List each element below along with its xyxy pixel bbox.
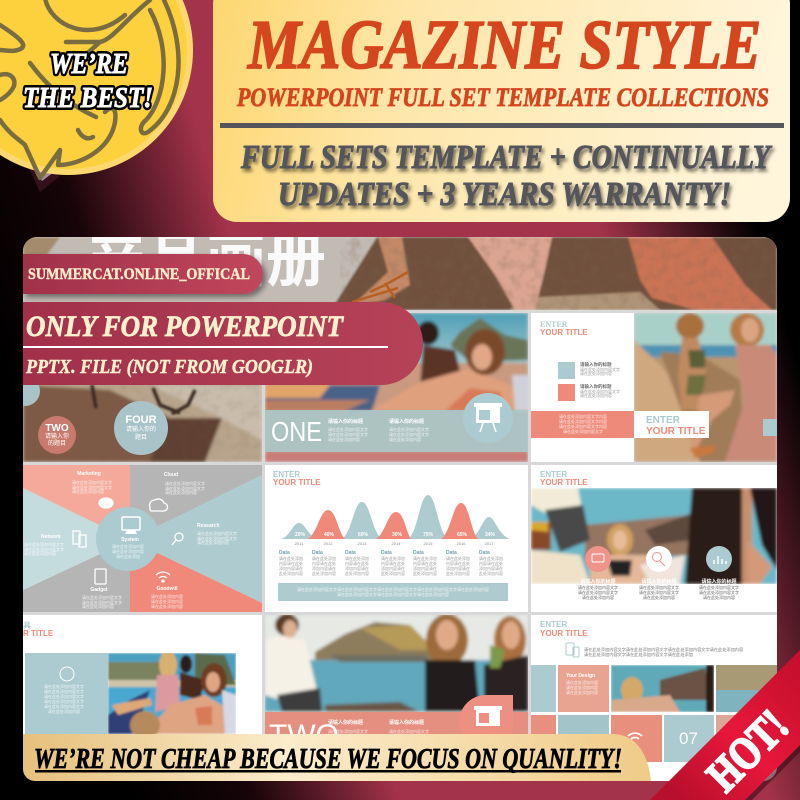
chart captions: 添加内容请在 <box>446 565 470 571</box>
legend squares: 请在此处添加内容文字 <box>580 388 620 394</box>
centre circle: system: System <box>121 537 139 543</box>
slide title: R TITLE <box>23 629 54 638</box>
slide title <box>23 621 54 638</box>
intro text: 请在此处添加内容文字请在此处添加内容文字请在此处添加内容文字请在此处添加内容 <box>584 646 743 653</box>
summary bar: 请在此处添加内容文字请在此处添加内容文字请在此处添加内容 <box>337 591 449 597</box>
slide: top photo strip <box>23 237 777 310</box>
photo: pool group <box>108 651 236 739</box>
teal text panel: 请在此处添加内容文字 <box>44 683 84 689</box>
circle: FOUR: 题目 <box>135 434 147 441</box>
chart captions: 添加内容请在 <box>413 565 437 571</box>
legend squares: 请在此处添加内容 <box>580 392 612 398</box>
ONE band: 请在此处添加内容 <box>389 436 421 442</box>
slide: tile grid <box>531 615 777 781</box>
slide title: YOUR TITLE <box>540 629 588 638</box>
chart: peaks: 75% <box>423 532 434 538</box>
teal text panel <box>25 653 108 738</box>
teal text panel: 请在此处添加内容文字 <box>44 698 84 704</box>
circle: search <box>646 546 672 572</box>
summary bar <box>278 583 508 601</box>
salmon text bar: 请在此处添加内容文字内容 <box>559 418 607 424</box>
slide: TWO <box>265 614 528 757</box>
sector labels: 请在此处添加内容 <box>151 603 183 609</box>
photo: sea and group <box>531 488 777 585</box>
tiles: 请在此处添加内容 <box>566 684 598 690</box>
slide: teal panel with photo <box>23 615 262 740</box>
circle: chart <box>706 546 732 572</box>
slide title: YOUR TITLE <box>273 478 321 487</box>
photo: sea and group: 请输入你的标题 <box>701 578 737 585</box>
TWO band: 请在此处添加内容文字 <box>389 728 429 734</box>
ONE band: 请在此处添加内容文字 <box>389 426 429 432</box>
TWO band: TWO <box>269 719 339 752</box>
file note: PPTX. FILE (NOT FROM GOOGLR) <box>25 356 313 378</box>
chart captions: 此处添加内容 <box>413 570 437 576</box>
photo: two women on rocks <box>634 313 777 462</box>
teal text panel: 请在此处添加内容文字 <box>44 688 84 694</box>
chart captions: 内容请在此处 <box>345 560 369 566</box>
legend squares: 请输入你的标题 <box>580 361 612 368</box>
circle captions: 请在此处添加内容文字 <box>699 584 739 590</box>
sector labels: Network <box>41 534 61 540</box>
circle: TWO: TWO <box>45 423 69 434</box>
TWO band: 请输入你的标题 <box>389 719 424 726</box>
hot ribbon <box>650 650 800 800</box>
sector labels: Research <box>197 523 220 529</box>
slide: ONE <box>265 313 528 462</box>
chart captions: 内容请在此处 <box>413 560 437 566</box>
circle captions: 请在此处添加内容文字 <box>578 584 618 590</box>
banner text: WE’RE NOT CHEAP BECAUSE WE FOCUS ON QUANLITY! <box>34 744 622 775</box>
promise text <box>240 139 773 213</box>
maroon label: account name <box>23 254 263 294</box>
salmon text bar: 请在此处添加内容文字内容 <box>559 413 607 419</box>
circle: TWO: 请输入你 <box>45 432 69 440</box>
sector labels: 请在此处添加内容文字 <box>24 541 64 547</box>
chart captions: 请在此处添加 <box>381 555 405 561</box>
circle: FOUR <box>114 401 168 455</box>
sector labels: Cloud <box>164 472 178 478</box>
sector: marketing <box>23 465 130 525</box>
sector labels: 请在此处添加内容文字 <box>197 535 237 541</box>
sector icons <box>73 498 183 584</box>
badge circle <box>0 0 193 175</box>
ONE band: 请在此处添加内容文字 <box>328 431 368 437</box>
ONE band: 请在此处添加内容文字 <box>389 431 429 437</box>
chart: peaks: 65% <box>457 532 468 538</box>
ONE band: 请在此处添加内容文字 <box>328 426 368 432</box>
underline <box>35 770 621 772</box>
chart captions: 添加内容请在 <box>345 565 369 571</box>
ONE band: 请在此处添加内容 <box>328 436 360 442</box>
slide title <box>540 322 588 335</box>
circle captions <box>578 584 739 600</box>
centre circle: system: 请在此处添加 <box>116 553 140 559</box>
circle captions: 请在此处添加内容文字 <box>699 589 739 595</box>
ribbon <box>650 650 800 800</box>
teal text panel: 请在此处添加内容文字 <box>44 703 84 709</box>
circle captions: 请在此处添加内容 <box>643 594 675 600</box>
slide: enter your title with photo <box>531 313 777 462</box>
chart: peaks: 2012 <box>324 541 333 546</box>
ONE band: 请输入你的标题 <box>389 418 424 425</box>
ribbon shadow <box>745 745 800 800</box>
sector labels: 请在此处添加内容 <box>197 539 229 545</box>
teal text panel: 请在此处添加内容文字 <box>44 693 84 699</box>
slide title: ENTER <box>540 620 567 629</box>
chart captions: 内容请在此处 <box>381 560 405 566</box>
TWO band <box>265 712 528 757</box>
legend squares <box>558 361 620 401</box>
chart captions: 内容请在此处 <box>279 560 303 566</box>
summary bar: 请在此处添加内容文字请在此处添加内容文字请在此处添加内容文字请在此处添加内容文字请在此处添加内容 <box>297 586 489 592</box>
maroon label: account name: SUMMERCAT.ONLINE_OFFICAL <box>28 266 250 283</box>
badge text: THE BEST! <box>23 82 153 114</box>
sector labels: 请在此处添加内容 <box>72 488 104 494</box>
sector labels: 请在此处添加内容文字 <box>72 479 112 485</box>
salmon text bar: 请在此处添加内容文字 <box>563 428 603 434</box>
teal text panel: 请在此处添加内容 <box>48 708 80 714</box>
chart captions: 此处添加内容 <box>312 570 336 576</box>
slide title <box>540 471 588 485</box>
tiles <box>531 665 777 762</box>
sandal <box>352 272 408 302</box>
sector labels: 请在此处添加内容文字 <box>24 546 64 552</box>
circle: FOUR: 请输入你的 <box>126 425 156 433</box>
centre circle: system <box>96 507 160 571</box>
promise text: UPDATES + 3 YEARS WARRANTY! <box>278 176 731 213</box>
chart captions: 添加内容请在 <box>279 565 303 571</box>
icon: cat line drawing <box>0 0 179 178</box>
slide: system sector diagram <box>23 465 262 612</box>
chart: peaks: 34% <box>485 532 496 538</box>
sector: goodwill <box>130 552 262 612</box>
badge text <box>23 48 153 114</box>
sector: research <box>157 475 262 603</box>
chart: peaks: 2015 <box>424 541 433 546</box>
chart captions: 内容请在此处 <box>479 560 503 566</box>
TWO band: 请在此处添加内容文字 <box>328 728 368 734</box>
sector labels <box>24 471 237 609</box>
slide title <box>273 471 320 485</box>
sector labels: 请在此处添加内容文字 <box>165 480 205 486</box>
chart captions: Data <box>381 550 392 556</box>
chart captions: 请在此处添加 <box>312 555 336 561</box>
centre circle: system: 请在此处添加内容 <box>112 548 144 554</box>
tiles: 07 <box>679 729 698 748</box>
icon: presentation board <box>463 393 513 443</box>
circle: FOUR: FOUR <box>125 414 157 426</box>
salmon text bar <box>531 411 634 438</box>
chart captions <box>279 550 503 576</box>
chart captions: 请在此处添加 <box>279 555 303 561</box>
ONE band: ONE <box>271 416 322 447</box>
legend squares: 请在此处添加内容 <box>580 370 612 376</box>
circle: chat <box>585 546 611 572</box>
sector labels: 请在此处添加内容文字 <box>82 594 122 600</box>
slide title: ENTER <box>540 320 568 329</box>
chart: peaks: 2013 <box>358 541 367 546</box>
chart: peaks <box>279 495 510 546</box>
maroon label: powerpoint only <box>23 302 423 385</box>
circle captions: 请在此处添加内容 <box>582 594 614 600</box>
sector: network <box>23 488 100 590</box>
chart captions: 此处添加内容 <box>279 570 303 576</box>
chart captions: Data <box>279 550 290 556</box>
circle captions: 请在此处添加内容文字 <box>639 589 679 595</box>
chart captions: 此处添加内容 <box>345 570 369 576</box>
chart captions: Data <box>312 550 323 556</box>
sector: cloud <box>130 465 262 526</box>
TWO band: 请输入你的标题 <box>328 719 363 726</box>
slide: three circles photo <box>531 465 777 612</box>
chart: peaks: 40% <box>324 532 335 538</box>
chart captions: Data <box>345 550 356 556</box>
circle: TWO: 的题目 <box>48 439 66 447</box>
sector labels: Gadget <box>90 587 108 593</box>
icon: presentation teardrop <box>459 695 513 749</box>
chart captions: 添加内容请在 <box>312 565 336 571</box>
title card: ENTER <box>646 415 681 426</box>
chart: peaks: 2014 <box>392 541 401 546</box>
photo: sea and group: 请输入你的标题 <box>641 578 677 585</box>
header banner <box>213 0 790 222</box>
template preview collage <box>10 212 777 781</box>
slide: sand photo with circles <box>23 385 262 462</box>
chart captions: 添加内容请在 <box>381 565 405 571</box>
sector labels: 请在此处添加内容 <box>151 598 183 604</box>
chart: peaks: 2011 <box>295 541 304 546</box>
chart: peaks: 2016 <box>457 541 466 546</box>
salmon text bar: 请在此处添加内容文字内容 <box>559 423 607 429</box>
chart captions: 请在此处添加 <box>345 555 369 561</box>
photo: sea and group: 请输入你的标题 <box>580 578 616 585</box>
chart captions: Data <box>479 550 490 556</box>
intro text: 请在此处添加内容文字请在此处添加内容文字请在此处添加 <box>584 651 693 658</box>
chart: peaks: 2017 <box>485 541 494 546</box>
sector labels: Marketing <box>77 471 101 477</box>
legend squares: 请在此处添加内容文字 <box>580 366 620 372</box>
title card <box>634 411 709 438</box>
chart captions: 此处添加内容 <box>479 570 503 576</box>
bottom quality banner <box>23 734 651 781</box>
slide title: YOUR TITLE <box>540 478 588 487</box>
centre circle: system: 请在此处添加内容 <box>112 543 144 549</box>
chart captions: 此处添加内容 <box>446 570 470 576</box>
slide title: ENTER <box>273 470 300 479</box>
tiles: 请在此处添加内容 <box>566 689 598 695</box>
chart captions: 此处添加内容 <box>381 570 405 576</box>
banner panel <box>213 0 790 222</box>
heading: ONLY FOR POWERPOINT <box>26 310 345 343</box>
chart: peaks: 30% <box>392 532 403 538</box>
intro text <box>566 643 743 658</box>
chart captions: 请在此处添加 <box>413 555 437 561</box>
magazine lettering: 产品画册 <box>86 212 326 299</box>
sector labels: 请在此处添加内容文字 <box>72 484 112 490</box>
circle captions: 请在此处添加内容 <box>703 594 735 600</box>
sector labels: Goodwill <box>156 586 178 592</box>
chart captions: Data <box>413 550 424 556</box>
slide title: YOUR TITLE <box>540 328 588 337</box>
chart captions: 请在此处添加 <box>479 555 503 561</box>
white rule <box>23 346 388 348</box>
circle captions: 请在此处添加内容文字 <box>639 584 679 590</box>
badge text: WE’RE <box>50 48 128 80</box>
sector labels: 请在此处添加内容文字 <box>197 530 237 536</box>
badge text: THE BEST! <box>23 82 153 114</box>
sector: gadget <box>23 554 130 612</box>
sector labels: 请在此处添加内容文字 <box>165 485 205 491</box>
ONE band: 请输入你的标题 <box>328 418 363 425</box>
chart captions: 内容请在此处 <box>312 560 336 566</box>
chart: peaks: 20% <box>295 532 306 538</box>
slide title: ENTER <box>540 470 567 479</box>
divider <box>220 123 784 128</box>
chart captions: 内容请在此处 <box>446 560 470 566</box>
circle: teal corner <box>23 385 40 406</box>
chart captions: 添加内容请在 <box>479 565 503 571</box>
sector labels: 请在此处添加内容 <box>151 593 183 599</box>
slide: mountain chart <box>265 465 528 612</box>
title card: YOUR TITLE <box>646 426 706 437</box>
chart captions: 请在此处添加 <box>446 555 470 561</box>
slide title <box>540 620 588 638</box>
circle: TWO <box>38 416 76 454</box>
tiles: Your Design <box>566 673 595 679</box>
circle captions: 请在此处添加内容文字 <box>578 589 618 595</box>
ONE band <box>265 410 528 452</box>
badge: we're the best <box>0 0 193 192</box>
tiles: 请在此处添加内容 <box>566 679 598 685</box>
sector labels: 请在此处添加内容 <box>82 603 114 609</box>
icon: badge tail <box>26 162 60 192</box>
slide title: 具 <box>23 621 31 630</box>
chart captions: Data <box>446 550 457 556</box>
badge text: WE’RE <box>50 48 128 80</box>
sector labels: 请在此处添加内容文字 <box>82 599 122 605</box>
teal tag <box>763 419 777 436</box>
legend squares: 请输入你的标题 <box>580 383 612 390</box>
sector labels: 请在此处添加内容 <box>165 489 197 495</box>
sector labels: 请在此处添加内容 <box>24 550 56 556</box>
chart: peaks: 60% <box>358 532 369 538</box>
